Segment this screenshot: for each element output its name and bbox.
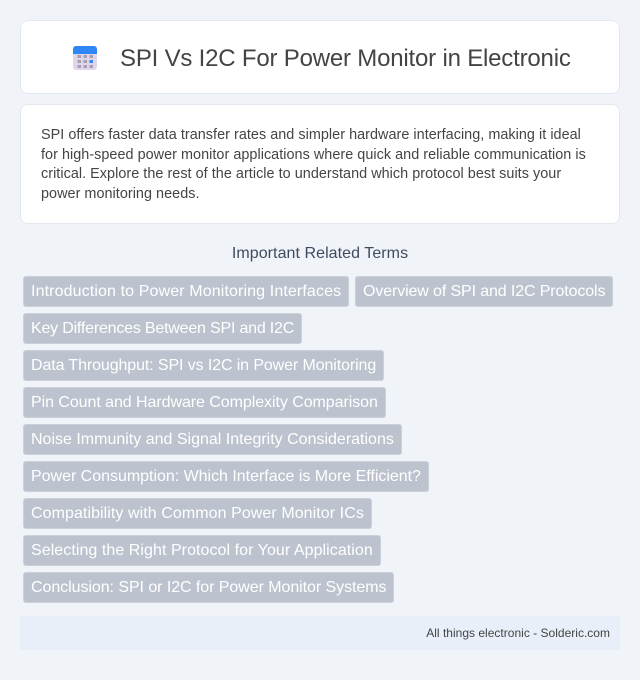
- tag: [23, 387, 386, 418]
- tag: [23, 461, 429, 492]
- tag: Compatibility with Common Power Monitor ICs: [31, 505, 364, 522]
- summary text: power monitoring needs.: [41, 186, 200, 202]
- tag: Overview of SPI and I2C Protocols: [363, 283, 605, 300]
- title: SPI Vs I2C For Power Monitor in Electronic: [120, 45, 571, 72]
- summary text: [41, 127, 586, 202]
- heading: related terms: Important Related Terms: [232, 245, 408, 262]
- tag: Data Throughput: SPI vs I2C in Power Monitoring: [31, 357, 376, 374]
- tag: [23, 276, 349, 307]
- tag: [23, 313, 302, 344]
- tag: [23, 424, 402, 455]
- tag: Introduction to Power Monitoring Interfaces: [31, 283, 341, 300]
- tag: Key Differences Between SPI and I2C: [31, 320, 294, 337]
- footer: All things electronic - Solderic.com: [426, 626, 610, 640]
- tag: [23, 572, 394, 603]
- tag: Selecting the Right Protocol for Your Application: [31, 542, 373, 559]
- tag: Pin Count and Hardware Complexity Comparison: [31, 394, 378, 411]
- tag: [23, 350, 384, 381]
- summary text: for high-speed power monitor applications where quick and reliable communication is: [41, 147, 586, 163]
- tag: Noise Immunity and Signal Integrity Considerations: [31, 431, 394, 448]
- footer: [20, 616, 620, 650]
- panel: title card: [20, 20, 620, 94]
- summary text: critical. Explore the rest of the article to understand which protocol best suits your: [41, 166, 561, 182]
- tag: [23, 535, 381, 566]
- tag: [355, 276, 613, 307]
- icon: calendar: [73, 46, 97, 70]
- summary text: SPI offers faster data transfer rates and simpler hardware interfacing, making it ideal: [41, 127, 581, 143]
- tag: [23, 498, 372, 529]
- tag: Conclusion: SPI or I2C for Power Monitor Systems: [31, 579, 386, 596]
- panel: summary card: [20, 104, 620, 224]
- tag: Power Consumption: Which Interface is More Efficient?: [31, 468, 421, 485]
